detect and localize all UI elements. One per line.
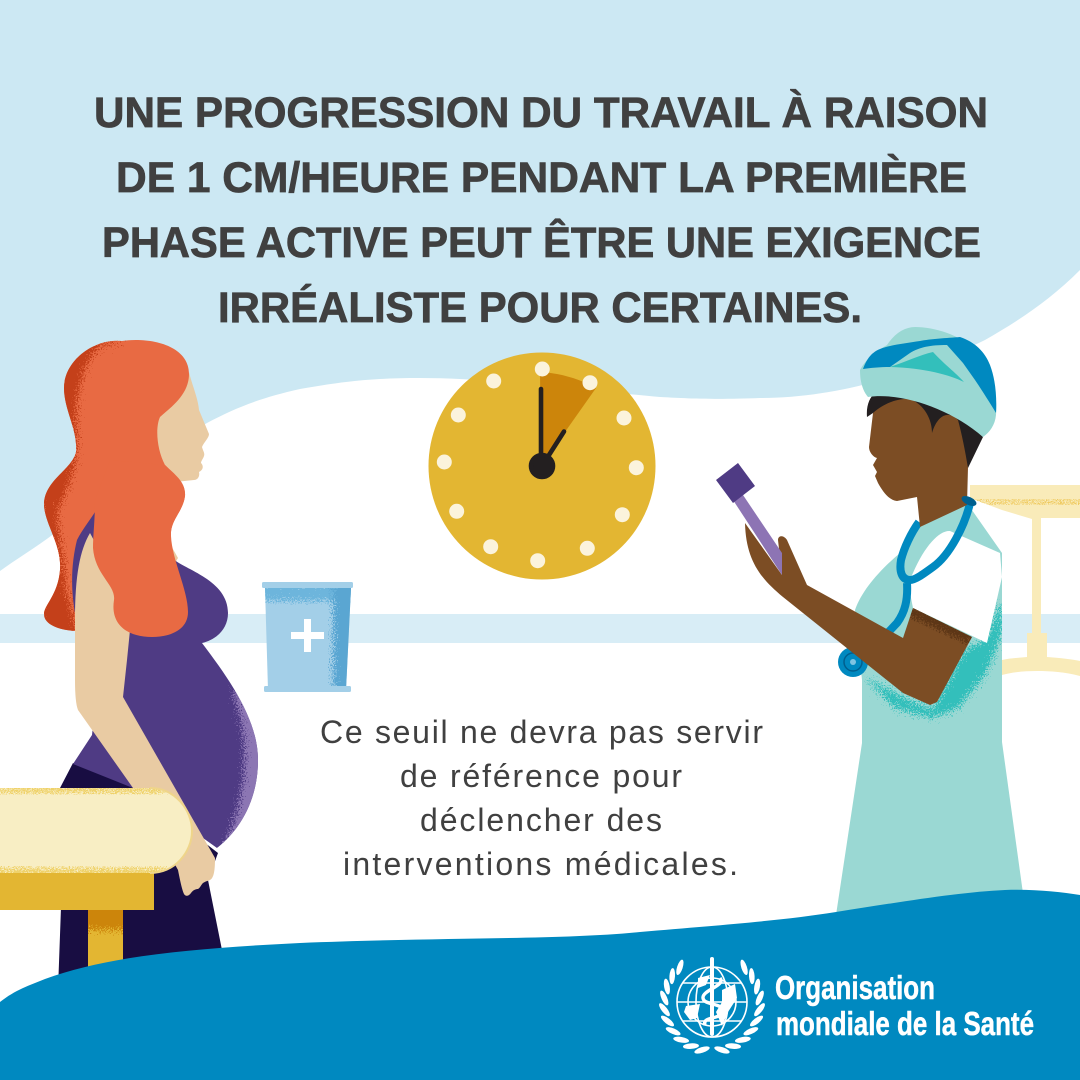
title — [94, 89, 988, 332]
title: DE 1 CM/HEURE PENDANT LA PREMIÈRE — [116, 154, 967, 202]
WHO logo — [657, 959, 1034, 1055]
face — [150, 372, 209, 482]
clock wedge: one hour segment — [540, 372, 596, 466]
rail bed — [0, 786, 192, 970]
title: UNE PROGRESSION DU TRAVAIL À RAISON — [94, 89, 988, 137]
chest piece — [838, 647, 868, 677]
hair nurse — [867, 393, 983, 468]
neck and head — [869, 385, 985, 527]
clock hands — [531, 389, 564, 477]
bed leg — [88, 910, 123, 966]
neck — [160, 535, 178, 568]
back hair with dark grain — [40, 340, 189, 640]
turban — [860, 327, 996, 437]
background: light blue sky — [0, 0, 1080, 571]
test tube / tablet — [716, 463, 782, 575]
WHO emblem — [657, 959, 767, 1055]
grain shadow under arm — [866, 600, 1002, 718]
clock — [428, 352, 656, 580]
arm and hand — [75, 533, 215, 896]
bottom blue wave — [0, 890, 1080, 1080]
body text: interventions médicales. — [343, 846, 738, 882]
body text — [320, 714, 763, 882]
table in background right — [965, 485, 1080, 676]
title: PHASE ACTIVE PEUT ÊTRE UNE EXIGENCE — [102, 218, 981, 267]
globe — [677, 967, 747, 1037]
clock dots — [437, 362, 644, 568]
stethoscope cap — [960, 494, 978, 508]
nurse scrubs — [836, 503, 1026, 915]
purple dress — [72, 512, 258, 848]
serpent — [703, 978, 722, 1025]
staff — [710, 959, 714, 1034]
continents — [684, 975, 737, 1026]
wreath leaves — [657, 959, 767, 1055]
body text: Ce seuil ne devra pas servir — [320, 714, 763, 750]
organisation name: Organisation — [775, 969, 935, 1006]
nurse arm and hand — [745, 523, 975, 705]
front hair lobe — [93, 460, 188, 637]
medical cup — [262, 582, 353, 692]
woman figure — [44, 340, 258, 974]
skirt — [58, 763, 222, 990]
white sleeve — [908, 531, 1002, 643]
organisation name — [775, 969, 1034, 1042]
white cross — [291, 619, 324, 652]
title: IRRÉALISTE POUR CERTAINES. — [218, 284, 862, 332]
stethoscope tubing — [862, 503, 970, 660]
nurse figure — [716, 327, 1026, 915]
horizontal wall band — [0, 614, 1080, 643]
body text: déclencher des — [420, 802, 662, 838]
body text: de référence pour — [400, 758, 682, 794]
